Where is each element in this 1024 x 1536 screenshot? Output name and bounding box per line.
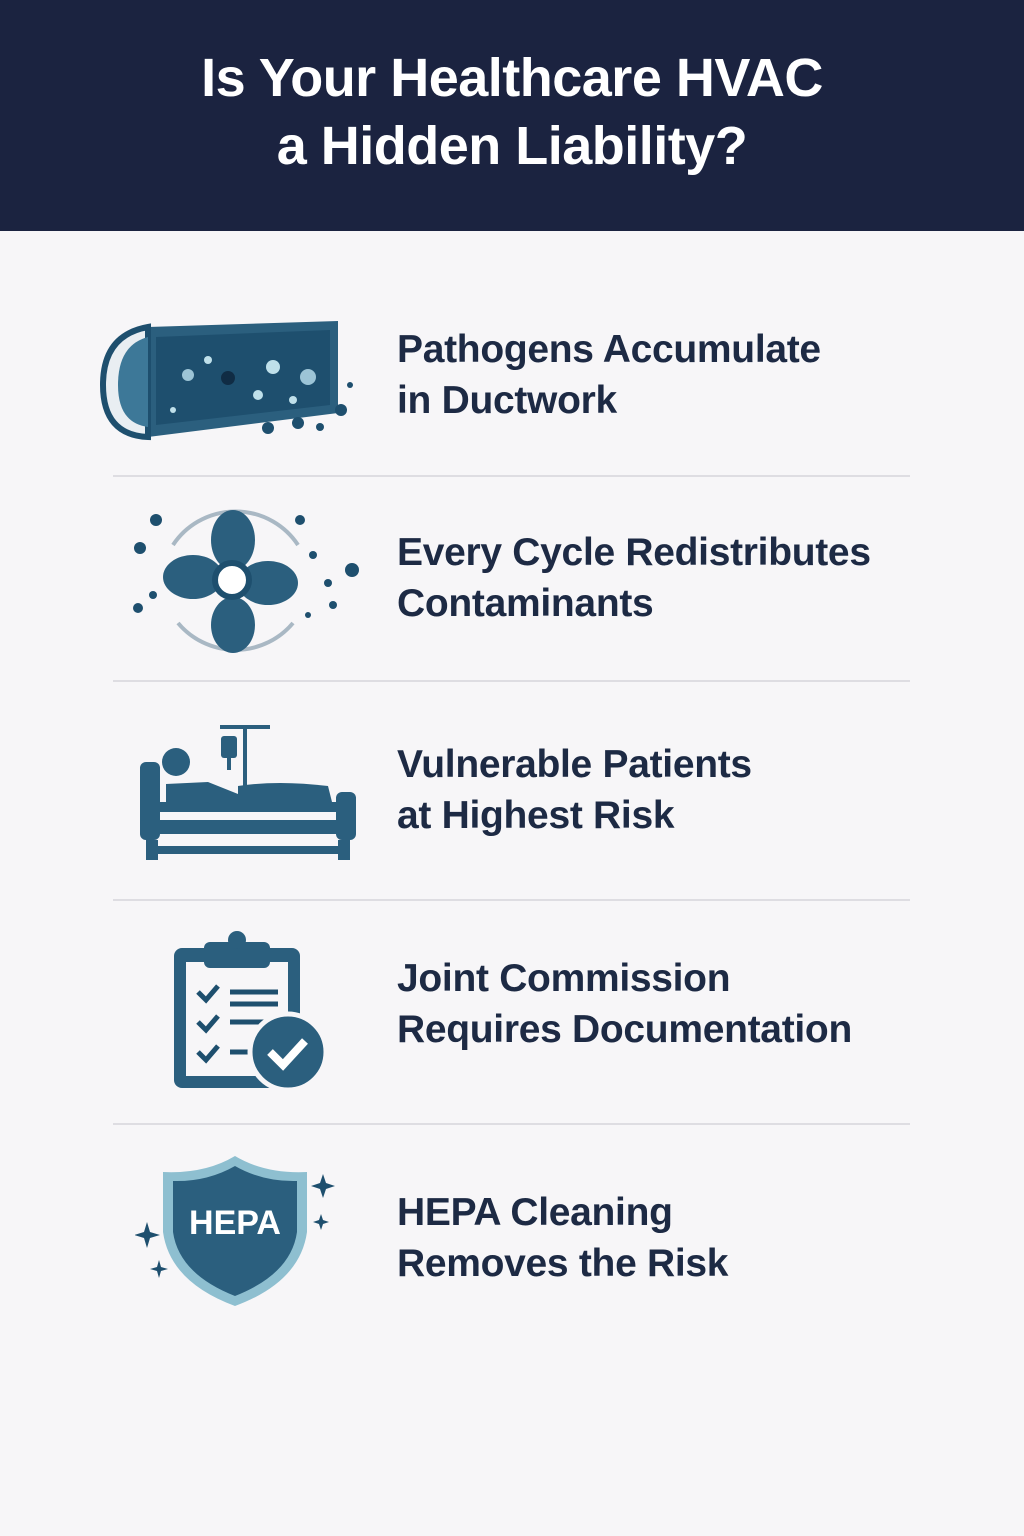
text: joint commission: Joint Commission <box>397 957 730 1000</box>
text: patients: at Highest Risk <box>397 794 674 837</box>
icon: HEPA shield <box>135 1156 335 1306</box>
text: cycle: Every Cycle Redistributes <box>397 531 871 574</box>
title <box>201 48 823 176</box>
text: cycle <box>397 531 871 625</box>
icon: HEPA shield: HEPA <box>189 1204 281 1242</box>
text: HEPA <box>397 1191 728 1285</box>
text: pathogens <box>397 328 821 422</box>
icon: hospital bed <box>140 725 356 860</box>
text: joint commission: Requires Documentation <box>397 1008 852 1051</box>
text: joint commission <box>397 957 852 1051</box>
icon: ductwork <box>100 321 353 440</box>
text: pathogens: Pathogens Accumulate <box>397 328 821 371</box>
text: pathogens: in Ductwork <box>397 379 617 422</box>
text: patients <box>397 743 752 837</box>
icon: clipboard <box>174 931 324 1088</box>
text: HEPA: HEPA Cleaning <box>397 1191 673 1234</box>
text: patients: Vulnerable Patients <box>397 743 752 786</box>
text: cycle: Contaminants <box>397 582 653 625</box>
title: a Hidden Liability? <box>277 116 747 176</box>
header bar <box>0 0 1024 231</box>
text: HEPA: Removes the Risk <box>397 1242 728 1285</box>
icon: fan <box>133 510 359 653</box>
title: Is Your Healthcare HVAC <box>201 48 823 108</box>
